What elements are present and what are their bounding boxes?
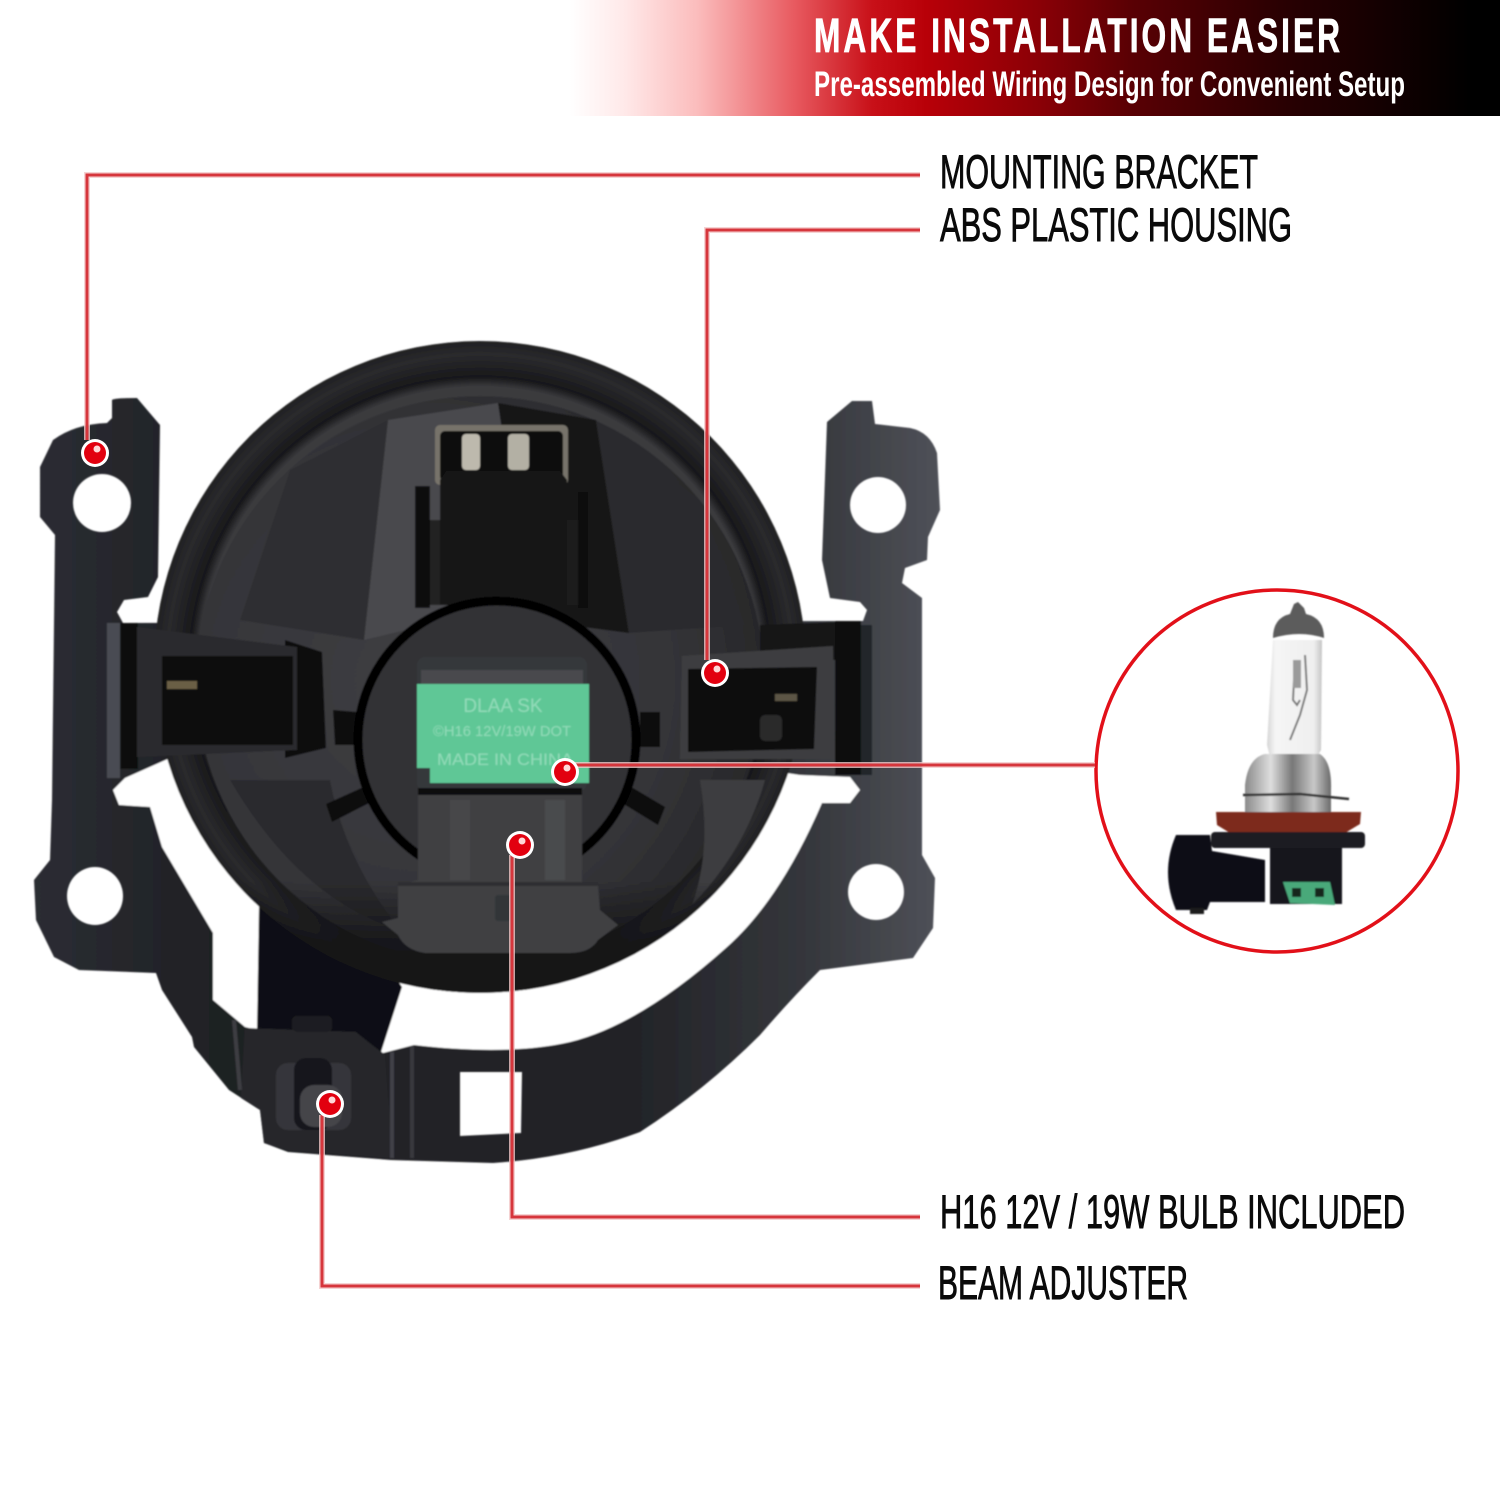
green bulb label [417,684,589,783]
callout dot: beam adjuster [316,1090,344,1118]
label: mounting bracket: MOUNTING BRACKET [940,145,1258,198]
halogen bulb [1168,602,1365,914]
label: abs plastic housing: ABS PLASTIC HOUSING [940,198,1292,251]
bulb label text: MADE IN CHINA [437,750,574,769]
left socket [137,627,326,758]
header title: MAKE INSTALLATION EASIER [814,8,1340,63]
bulb label text [433,696,574,769]
lower white opening [113,700,860,1053]
mounting bracket [34,398,940,1163]
lamp socket ring [358,601,636,879]
bracket folds [107,621,872,778]
bulb connector [382,788,618,953]
bulb back [417,657,587,791]
callout lines [87,175,1095,1286]
callout dot: bulb included [506,831,534,859]
lamp socket tabs [326,710,665,825]
circular bulb inset [1096,590,1458,952]
adjuster mount [257,880,402,1052]
beam adjuster [276,1016,351,1130]
callout dot: bulb inset [551,758,579,786]
callout dot: mounting bracket [81,439,109,467]
fog light assembly [34,341,940,1163]
housing rim [154,341,806,993]
connector block [415,471,588,608]
housing panels [232,402,765,993]
callout dot: housing [701,659,729,687]
right socket [680,622,835,759]
top glossy cap [435,425,568,485]
bracket plate below mount [241,1028,392,1158]
bulb label text: DLAA SK [463,696,543,717]
bulb label text: ©H16 12V/19W DOT [433,723,571,740]
header banner [570,0,1500,116]
plate creases [234,1020,412,1158]
label: beam adjuster: BEAM ADJUSTER [938,1256,1188,1309]
housing dome [196,396,764,964]
